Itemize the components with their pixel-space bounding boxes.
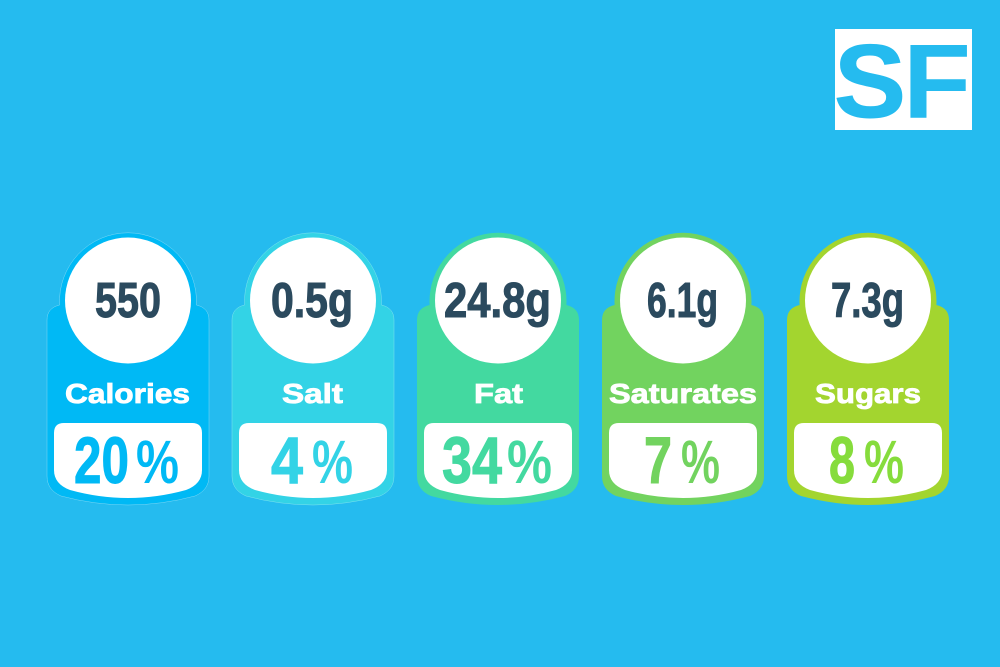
panel: saturates: % — [681, 428, 720, 496]
panel: calories — [47, 233, 209, 505]
logo: SF: S — [834, 24, 906, 140]
panel: sugars: 8 — [829, 423, 855, 497]
panel: sugars: % — [864, 428, 904, 496]
panel: salt: Salt — [282, 378, 343, 409]
panel: saturates: 6.1g — [647, 274, 718, 328]
logo: SF: F — [903, 22, 971, 140]
panel: salt: 0.5g — [271, 274, 353, 328]
panel: calories: % — [136, 428, 179, 496]
panel: saturates — [602, 233, 764, 505]
panel: fat: % — [507, 428, 552, 496]
panel: saturates: 7 — [644, 423, 672, 497]
panel: sugars: 7.3g — [831, 274, 904, 328]
panel: fat: 24.8g — [444, 274, 551, 328]
panel: fat — [417, 233, 579, 505]
panel: fat: 34 — [442, 423, 502, 497]
panel: calories: 550 — [95, 274, 161, 328]
panel: fat: Fat — [474, 378, 523, 409]
panel: calories: 20 — [74, 423, 129, 497]
panel: sugars: Sugars — [815, 378, 921, 409]
panel: sugars — [787, 233, 949, 505]
panel: salt: 4 — [271, 423, 303, 497]
panel: salt — [232, 233, 394, 505]
panel: calories: Calories — [65, 378, 190, 409]
panel: saturates: Saturates — [609, 378, 757, 409]
panel: salt: % — [312, 428, 353, 496]
logo: SF — [834, 22, 972, 140]
